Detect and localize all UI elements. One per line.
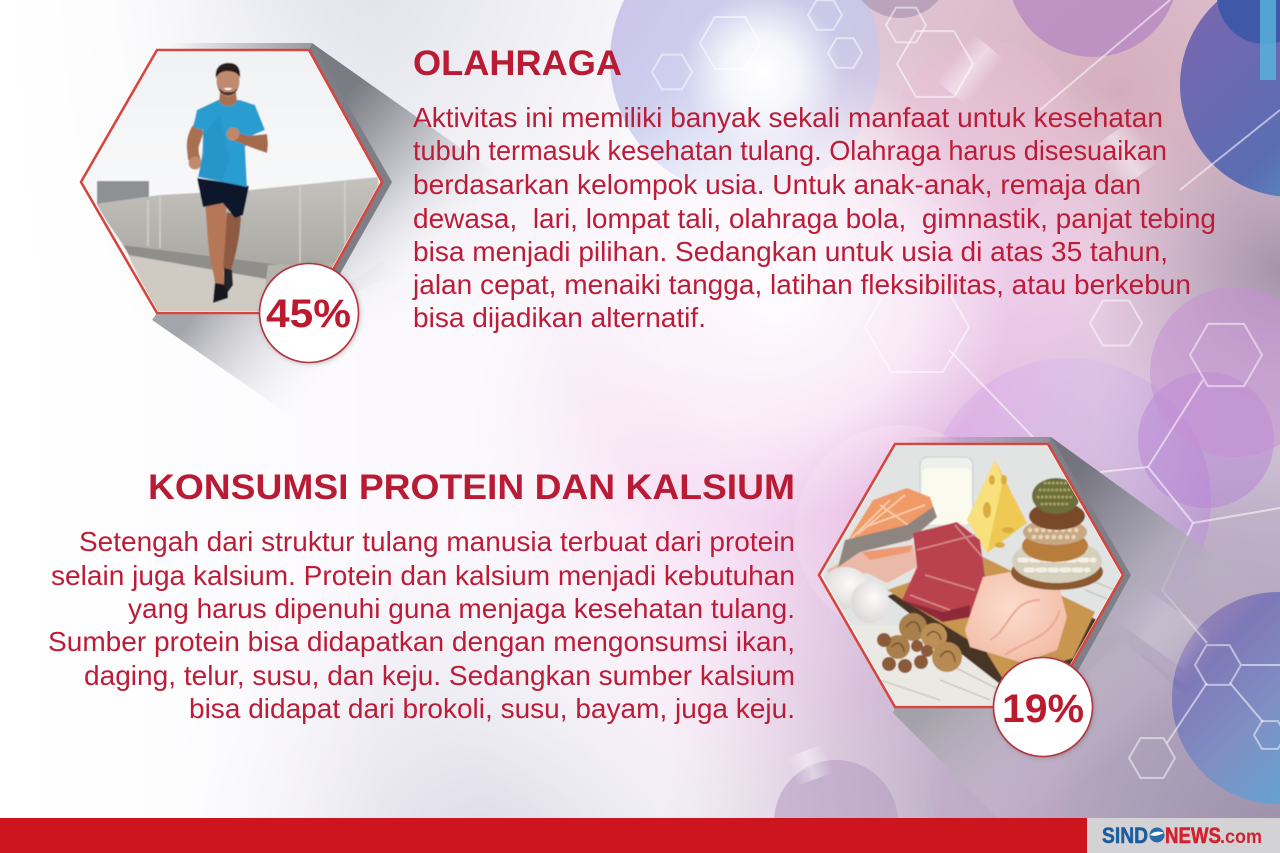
text block: konsumsi protein dan kalsium: daging, telur, susu, dan keju. Sedangkan sumber kalsium: [84, 660, 795, 691]
percentage badge 45%: 45%: [266, 292, 351, 336]
photo: runner: [80, 50, 385, 315]
percentage badge 19%: [994, 658, 1092, 756]
text block: olahraga: jalan cepat, menaiki tangga, latihan fleksibilitas, atau berkebun: [412, 269, 1191, 300]
hexagon long shadow: [152, 43, 520, 450]
panel: olahraga hexagon photo: [80, 43, 478, 398]
milk glass: [920, 457, 973, 525]
figure: runner body: [187, 63, 268, 303]
heading: konsumsi protein dan kalsium: KONSUMSI PROTEIN DAN KALSIUM: [148, 468, 795, 507]
hexagon long shadow: [893, 437, 1280, 853]
bean bowls: [1011, 478, 1103, 590]
hexagon frame: [819, 444, 1123, 707]
logo: sindonews: [1102, 823, 1262, 848]
percentage badge 19%: 19%: [1002, 687, 1084, 731]
nuts: [877, 613, 962, 673]
panel: protein hexagon photo: [818, 437, 1250, 770]
text block: konsumsi protein dan kalsium: [48, 526, 795, 724]
footer bar: [0, 818, 1280, 853]
cheese: [967, 460, 1027, 553]
salmon: [827, 488, 937, 583]
photo: protein foods: [815, 440, 1130, 710]
text block: olahraga: bisa dijadikan alternatif.: [413, 302, 706, 333]
meat: [902, 522, 985, 622]
text block: konsumsi protein dan kalsium: Sumber protein bisa didapatkan dengan mengonsumsi ikan,: [48, 626, 795, 657]
percentage badge 45%: [260, 264, 358, 362]
cutting board: [888, 593, 1096, 684]
logo: sindonews: SIND: [1102, 823, 1148, 848]
logo: sindonews: .com: [1220, 827, 1262, 848]
text block: olahraga: [412, 102, 1216, 333]
text block: olahraga: bisa menjadi pilihan. Sedangkan untuk usia di atas 35 tahun,: [413, 236, 1168, 267]
eggs: [828, 566, 889, 622]
chicken: [965, 572, 1067, 663]
text block: olahraga: dewasa, lari, lompat tali, olahraga bola, gimnastik, panjat tebing: [413, 203, 1216, 234]
text block: olahraga: tubuh termasuk kesehatan tulang. Olahraga harus disesuaikan: [413, 135, 1167, 166]
logo: sindonews: NEWS: [1165, 823, 1221, 848]
text block: konsumsi protein dan kalsium: bisa didapat dari brokoli, susu, bayam, juga keju.: [189, 693, 795, 724]
text block: konsumsi protein dan kalsium: Setengah dari struktur tulang manusia terbuat dari protein: [79, 526, 795, 557]
text block: olahraga: Aktivitas ini memiliki banyak sekali manfaat untuk kesehatan: [413, 102, 1163, 133]
hexagon frame: [81, 50, 382, 313]
heading: olahraga: OLAHRAGA: [413, 44, 622, 83]
text block: konsumsi protein dan kalsium: selain juga kalsium. Protein dan kalsium menjadi kebutuhan: [51, 560, 795, 591]
text block: konsumsi protein dan kalsium: yang harus dipenuhi guna menjaga kesehatan tulang.: [128, 593, 795, 624]
text block: olahraga: berdasarkan kelompok usia. Untuk anak-anak, remaja dan: [413, 169, 1141, 200]
